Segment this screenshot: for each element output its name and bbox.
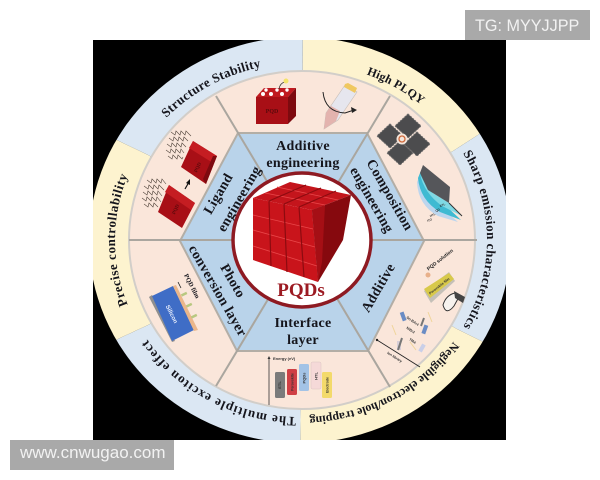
hexagon	[180, 133, 424, 351]
band: multiple exciton effect	[116, 324, 301, 440]
hex label: Additive engineering	[266, 139, 340, 171]
arrow between cubes	[185, 179, 190, 189]
watermark: website: www.cnwugao.com	[19, 443, 166, 462]
hex label: Additive engineering: engineering	[266, 156, 340, 171]
outer label: Structure Stability: Structure Stability	[162, 61, 260, 118]
icon: PQD solution slot coater: Perovskite film	[428, 277, 450, 295]
outer label: The multiple exciton effect: The multiple exciton effect	[142, 340, 296, 426]
icon: perovskite octahedra	[377, 114, 430, 165]
icon: layered QLED sheet: QD	[435, 207, 441, 213]
center circle	[233, 173, 371, 307]
icon: energy level diagram: Perovskite	[290, 373, 294, 391]
black background square	[93, 40, 506, 440]
hex label: Ligand engineering: Ligand	[201, 171, 237, 217]
icon: silicon solar cell with PQD film	[149, 273, 201, 342]
icon: PQD solution slot coater: PQD solution	[426, 248, 455, 272]
ligand zigzags	[142, 131, 191, 207]
center cube	[253, 182, 351, 282]
hex label: Additive engineering: Additive	[276, 139, 330, 154]
hex label: Composition engineering: Composition	[363, 157, 415, 233]
hex label: Photo conversion layer: Photo	[216, 262, 248, 301]
hex label: Composition engineering: engineering	[346, 165, 396, 236]
peach inner disc	[129, 71, 475, 409]
icon: layered QLED sheet: ETL	[439, 202, 446, 208]
upper cube: PQD	[194, 162, 203, 174]
icon: PQD solution slot coater	[424, 248, 465, 311]
watermark: TG	[465, 10, 590, 40]
center label: PQDs: PQDs	[277, 280, 325, 301]
hex label: Interface layer: layer	[287, 333, 319, 348]
outer label: Sharp emission characteristics: Sharp emission characteristics	[464, 150, 496, 329]
icon: silicon solar cell with PQD film: PQD film	[182, 273, 201, 300]
icon: energy level diagram: Electrode	[326, 377, 330, 393]
icon: energy level diagram: PQDs	[302, 372, 306, 383]
icon: PQD box with fuse	[256, 78, 296, 124]
band: precise controllability	[93, 140, 150, 340]
hex label: Additive: Additive	[359, 261, 399, 315]
hex label: Ligand engineering: engineering	[215, 164, 265, 235]
icon: layered additive diagram with axis: Ion library	[386, 351, 403, 363]
icon: layered additive diagram with axis: NiBr2	[406, 326, 416, 335]
hex label: Interface layer	[274, 316, 332, 348]
outer label: Precise controllability: Precise controllability	[107, 174, 128, 308]
band: structure stability	[116, 40, 303, 156]
watermark: website	[10, 440, 174, 470]
watermark: TG: TG: MYYJJPP	[475, 17, 579, 35]
icon: layered QLED sheet: HTL	[429, 212, 436, 218]
icon: layered additive diagram with axis: TMA	[408, 337, 417, 345]
outer label: Negligible electron/hole trapping: Negligible electron/hole trapping	[310, 342, 460, 424]
band: high PLQY	[302, 40, 480, 152]
icon: layered QLED sheet	[417, 165, 462, 223]
icon: energy level diagram: ETL	[277, 381, 282, 389]
hex label: Photo conversion layer: conversion layer	[185, 243, 249, 340]
icon: energy level diagram: Energy (eV)	[273, 356, 296, 361]
icon: PQD box with fuse: PQD	[266, 109, 279, 115]
spokes	[129, 96, 477, 387]
icon: energy level diagram	[268, 356, 332, 405]
outer label: High PLQY: High PLQY	[366, 67, 426, 104]
icon: layered QLED sheet: ITO	[426, 217, 433, 223]
icon: layered additive diagram with axis: Sn-BAr4	[406, 316, 419, 327]
band: sharp emission	[451, 134, 506, 342]
outer ring with six property bands	[93, 40, 506, 440]
icon: centrifuge tube with arrow	[323, 83, 357, 129]
hex label: Interface layer: Interface	[274, 316, 332, 331]
icon: layered additive diagram with axis	[376, 312, 432, 367]
band: negligible trapping	[300, 326, 483, 440]
icon: energy level diagram: HTL	[314, 372, 318, 380]
icon: silicon solar cell with PQD film: Silicon	[164, 304, 178, 325]
lower cube: PQD	[172, 204, 181, 216]
icon: ligand-capped PQD cubes with arrow	[142, 131, 217, 228]
